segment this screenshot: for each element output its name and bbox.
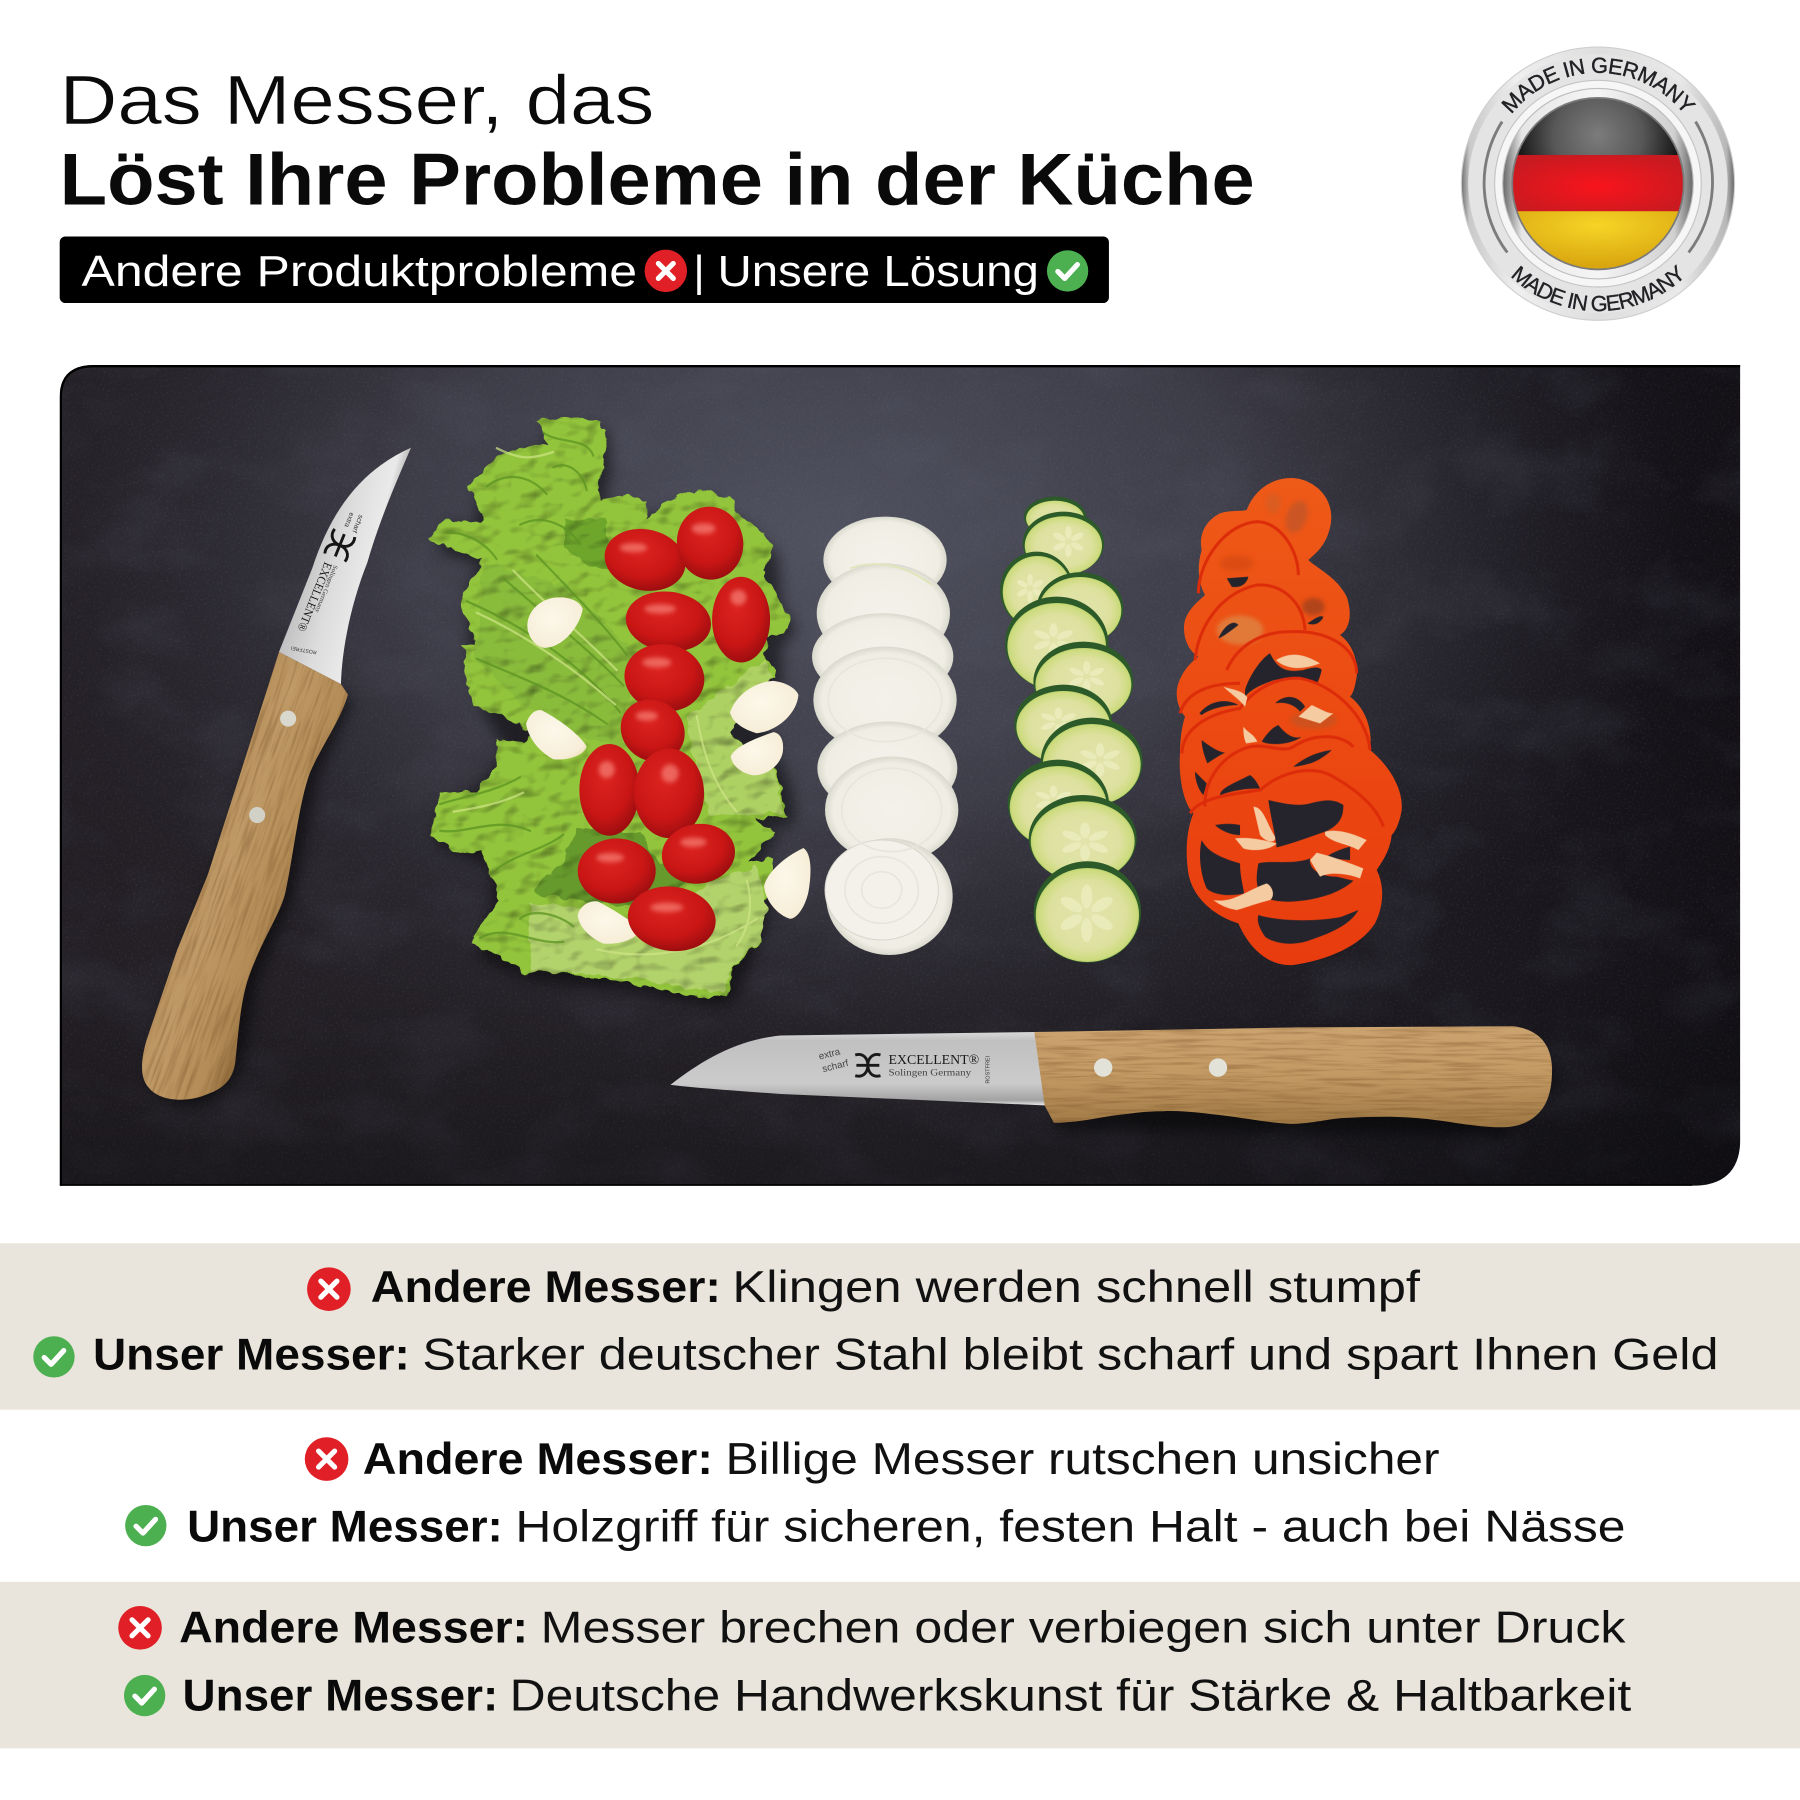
- panel: comparison row 3: [0, 1582, 1800, 1748]
- badge: made in germany: [1460, 46, 1736, 321]
- badge: made in germany: MADE IN GERMANY: [1501, 57, 1696, 114]
- straight paring knife: [670, 1022, 1561, 1136]
- pepper flesh shading: [1217, 493, 1337, 729]
- blade engraving: Solingen Germany: [313, 564, 339, 614]
- pepper rims: [1180, 522, 1383, 827]
- blade engraving: scharf: [350, 514, 364, 534]
- icon: green check: [1047, 250, 1088, 292]
- badge: made in germany: MADE IN GERMANY: [1511, 264, 1682, 312]
- panel: comparison row 2: Andere Messer:: [363, 1435, 713, 1484]
- title: [60, 61, 1255, 220]
- blade: [670, 1032, 1047, 1105]
- panel: comparison row 2: [125, 1435, 1626, 1552]
- panel: comparison row 3: Deutsche Handwerkskunst für Stärke & Haltbarkeit: [510, 1671, 1631, 1720]
- panel: comparison row 3: Andere Messer:: [179, 1604, 528, 1653]
- icon: green check: [33, 1336, 75, 1378]
- blade engraving: ROSTFREI: [986, 1055, 992, 1084]
- cucumber slices: [1000, 497, 1143, 963]
- panel: kitchen photo: [0, 365, 1740, 1235]
- panel: comparison row 1: Andere Messer:: [371, 1263, 721, 1312]
- handle: [142, 652, 348, 1100]
- subtitle bar: Andere Produktprobleme: [82, 248, 637, 296]
- panel: comparison row 1: Unser Messer:: [93, 1331, 410, 1380]
- onion slices: [812, 517, 958, 955]
- red pepper rings: [1177, 478, 1402, 965]
- blade engraving: Solingen Germany: [889, 1068, 972, 1078]
- pepper ribs: [1213, 655, 1367, 910]
- tomatoes: [578, 498, 770, 955]
- subtitle bar: |: [693, 248, 705, 296]
- blade engraving: extra: [342, 511, 355, 528]
- lettuce: [428, 416, 797, 1006]
- blade engraving: EXCELLENT®: [889, 1052, 979, 1067]
- pepper holes: [1195, 577, 1358, 944]
- panel: comparison row 3: Messer brechen oder verbiegen sich unter Druck: [541, 1604, 1627, 1653]
- panel: comparison row 1: [0, 1243, 1800, 1410]
- icon: red cross: [305, 1437, 348, 1481]
- blade: [279, 448, 411, 684]
- panel: comparison row 2: Holzgriff für sicheren, festen Halt - auch bei Nässe: [515, 1503, 1626, 1552]
- curved paring knife: [142, 448, 411, 1108]
- blade engraving: extra: [818, 1046, 842, 1062]
- flag: [1513, 99, 1683, 269]
- panel: comparison row 2: Billige Messer rutschen unsicher: [726, 1435, 1440, 1484]
- blade engraving: [819, 1050, 990, 1084]
- title: Löst Ihre Probleme in der Küche: [60, 137, 1255, 220]
- subtitle bar: Unsere Lösung: [717, 248, 1039, 296]
- handle: [1034, 1026, 1552, 1127]
- icon: red cross: [307, 1267, 351, 1311]
- panel: comparison row 3: Unser Messer:: [183, 1671, 498, 1720]
- blade engraving: scharf: [821, 1058, 850, 1075]
- panel: comparison row 1: Klingen werden schnell stumpf: [732, 1263, 1421, 1312]
- icon: red cross: [118, 1606, 162, 1650]
- icon: green check: [124, 1675, 165, 1716]
- panel: comparison row 2: Unser Messer:: [187, 1503, 503, 1552]
- blade engraving: EXCELLENT®: [295, 560, 335, 634]
- subtitle bar: [60, 236, 1109, 303]
- blade engraving: ROSTFREI: [290, 644, 317, 655]
- icon: green check: [125, 1505, 166, 1546]
- icon: red cross: [645, 250, 687, 292]
- blade engraving: [290, 511, 364, 655]
- panel: comparison row 1: Starker deutscher Stahl bleibt scharf und spart Ihnen Geld: [422, 1331, 1718, 1380]
- lettuce folds: [440, 433, 757, 954]
- title: Das Messer, das: [60, 61, 654, 139]
- garlic cloves: [526, 597, 810, 944]
